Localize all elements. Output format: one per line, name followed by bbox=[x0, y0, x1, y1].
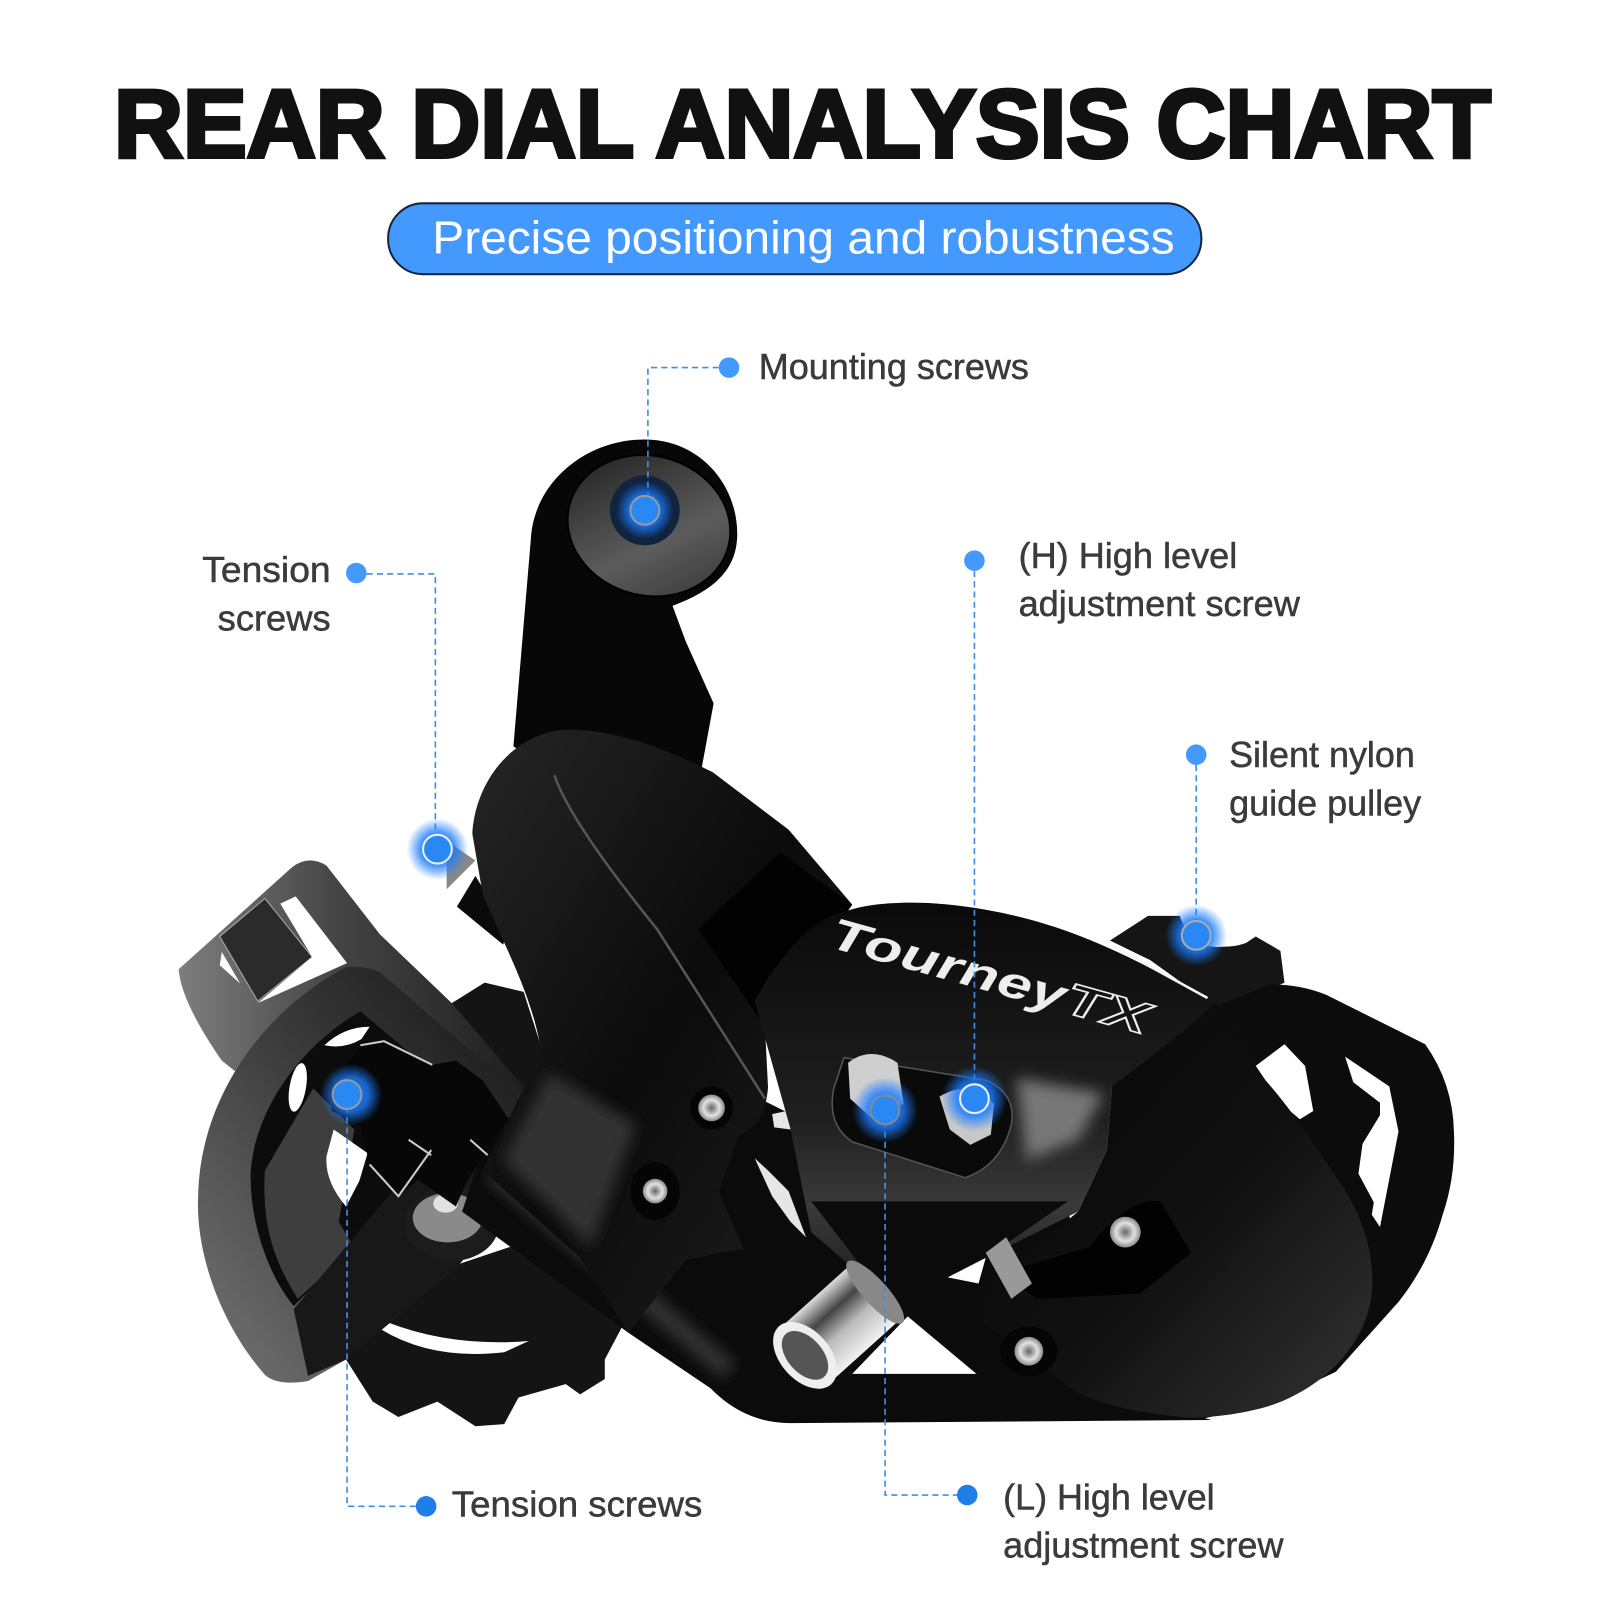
label: tension screws upper: screws bbox=[218, 597, 331, 638]
tab white slit bbox=[258, 896, 347, 1003]
cage hole right bbox=[1345, 1057, 1398, 1227]
label: H adjustment screw: (H) High level bbox=[1019, 535, 1237, 576]
lower pulley white crescent bbox=[380, 1323, 529, 1354]
body soft highlight bbox=[1017, 1078, 1104, 1160]
label: silent nylon guide pulley: guide pulley bbox=[1229, 782, 1422, 823]
body dark lower bbox=[811, 1201, 1068, 1335]
tourney logo bbox=[825, 909, 1158, 1045]
upper bracket bbox=[513, 439, 737, 780]
cage tab bbox=[179, 860, 534, 1129]
label: silent nylon guide pulley: Silent nylon bbox=[1229, 734, 1415, 775]
inner pulley disc bbox=[264, 1088, 354, 1299]
cage hole upper bbox=[1256, 1044, 1313, 1119]
tourney logo: Tourney bbox=[825, 909, 1075, 1022]
subtitle pill: Precise positioning and robustness bbox=[432, 212, 1175, 264]
dashed leader lines bbox=[347, 368, 1196, 1506]
right cage plate bbox=[1078, 985, 1454, 1419]
center body bbox=[755, 903, 1232, 1335]
pulley bearing bbox=[405, 1187, 499, 1261]
bar highlight bbox=[493, 1171, 729, 1371]
ring inner cavity bbox=[251, 1011, 483, 1306]
white triangles bbox=[852, 1258, 986, 1374]
hotspot: guide pulley bbox=[1165, 905, 1227, 966]
hotspot: H screw bbox=[942, 1066, 1007, 1132]
subtitle pill bbox=[388, 203, 1201, 274]
upper rear pulley left bbox=[452, 983, 554, 1088]
right guide pulley teeth bbox=[1110, 916, 1285, 1011]
hotspot: upper tension screw bbox=[407, 818, 468, 880]
tourney logo: TX bbox=[1059, 974, 1158, 1045]
cage ring bbox=[198, 967, 523, 1383]
label: tension screws upper: Tension bbox=[202, 549, 331, 590]
lower cage arm bbox=[294, 1129, 534, 1376]
label: tension screws upper bbox=[202, 549, 367, 638]
left adjustment screw bbox=[848, 1054, 904, 1119]
screw heads bbox=[630, 1086, 1141, 1376]
knuckle arm bbox=[472, 730, 852, 1333]
arm highlight bbox=[554, 775, 765, 1099]
center gap highlights bbox=[755, 1109, 806, 1237]
rear cover bbox=[982, 1003, 1372, 1417]
label: H adjustment screw: adjustment screw bbox=[1019, 583, 1301, 624]
label: tension screws lower: Tension screws bbox=[452, 1484, 702, 1525]
right adjustment screw bbox=[940, 1089, 994, 1145]
lower pulley bbox=[346, 1232, 623, 1426]
clamp piece bbox=[332, 1041, 508, 1206]
bracket washer bbox=[552, 437, 746, 614]
label: L adjustment screw: adjustment screw bbox=[1003, 1525, 1284, 1566]
label: L adjustment screw: (L) High level bbox=[1003, 1476, 1215, 1517]
label: mounting screws: Mounting screws bbox=[759, 346, 1029, 387]
hotspot: lower tension screw bbox=[320, 1064, 382, 1125]
barrel nut bbox=[759, 1253, 912, 1402]
clamp light edges bbox=[360, 1041, 488, 1196]
adjustment screw plate bbox=[832, 1058, 1012, 1178]
label: H adjustment screw bbox=[964, 535, 1301, 624]
label: L adjustment screw bbox=[957, 1476, 1284, 1566]
rear derailleur illustration bbox=[179, 437, 1454, 1426]
lower body backdrop bbox=[462, 1088, 1212, 1423]
side screw stub bbox=[447, 841, 475, 889]
tab dark window bbox=[220, 898, 312, 1001]
label: silent nylon guide pulley bbox=[1186, 734, 1422, 823]
hotspot: mounting screw bbox=[616, 482, 674, 539]
spring bbox=[986, 1237, 1032, 1299]
hotspot: L screw bbox=[852, 1077, 918, 1143]
title: REAR DIAL ANALYSIS CHART bbox=[114, 71, 1491, 178]
cover recess bbox=[1001, 1201, 1191, 1299]
mounting bolt bbox=[610, 475, 680, 545]
body top highlight bbox=[1114, 947, 1208, 998]
dark housing wedge bbox=[698, 852, 852, 1027]
arm soft band bbox=[503, 1073, 637, 1248]
ring white holes bbox=[324, 1027, 370, 1046]
